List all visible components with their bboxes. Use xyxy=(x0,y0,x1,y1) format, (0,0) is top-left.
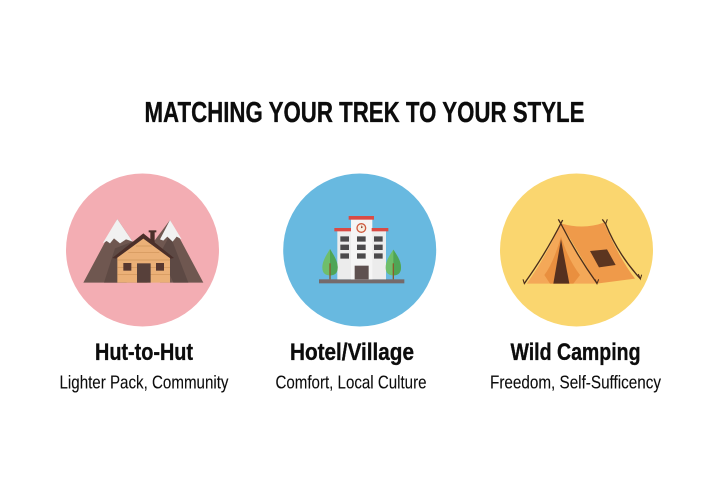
label: wild camping: Wild Camping xyxy=(510,339,640,366)
panel: wild camping xyxy=(490,174,661,392)
icon circle: yellow xyxy=(500,174,653,326)
description: hotel/village: Comfort, Local Culture xyxy=(276,372,426,392)
panel: hut-to-hut xyxy=(60,174,228,392)
icon: hotel building with trees xyxy=(319,216,404,283)
title: MATCHING YOUR TREK TO YOUR STYLE xyxy=(144,97,584,129)
panel: hotel/village xyxy=(276,174,436,392)
icon circle: blue xyxy=(283,174,436,326)
description: hut-to-hut: Lighter Pack, Community xyxy=(60,372,228,392)
label: hotel/village: Hotel/Village xyxy=(290,339,414,366)
description: wild camping: Freedom, Self-Sufficency xyxy=(490,372,661,392)
icon: tent xyxy=(523,219,642,284)
label: hut-to-hut: Hut-to-Hut xyxy=(95,339,193,366)
icon circle: pink xyxy=(66,174,219,326)
icon: mountains and cabin xyxy=(83,219,203,283)
